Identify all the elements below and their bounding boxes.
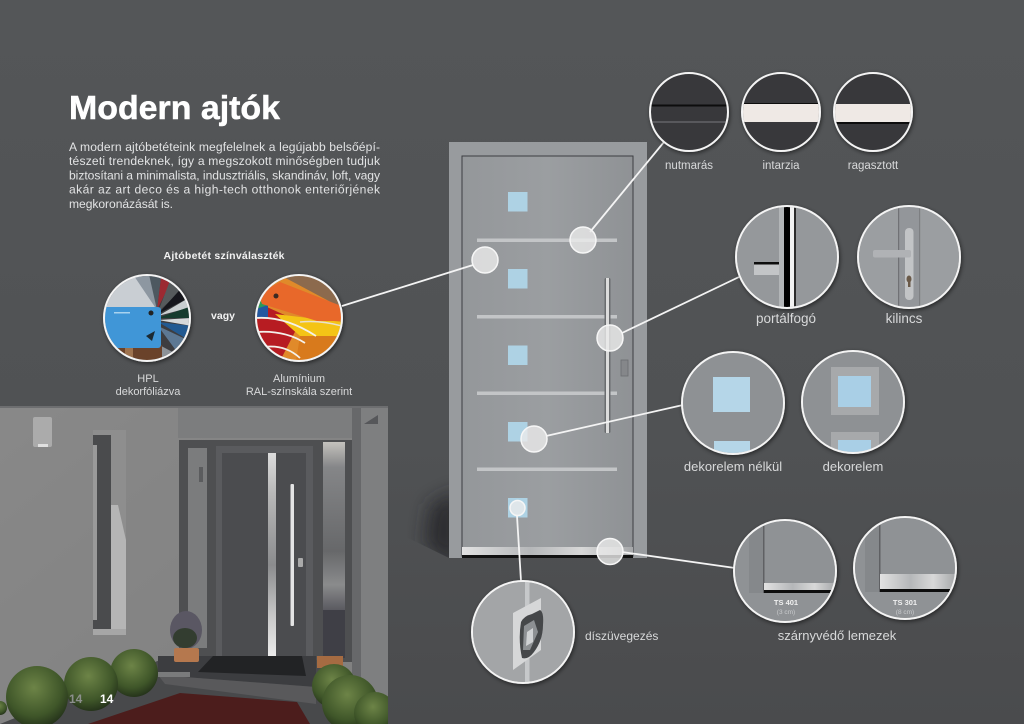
callout lines xyxy=(342,142,739,581)
hotspots xyxy=(472,227,623,564)
label: kilincs: kilincs xyxy=(886,311,923,326)
steel kick plate xyxy=(462,547,633,555)
detail: díszüvegezés xyxy=(472,581,574,683)
label: ragasztott: ragasztott xyxy=(848,160,899,172)
label: díszüvegezés: díszüvegezés xyxy=(585,629,658,643)
detail: TS 401: (3 cm) xyxy=(777,609,795,616)
label: dekorelem nélkül: dekorelem nélkül xyxy=(684,459,782,474)
detail: kilincs xyxy=(858,206,960,308)
lock xyxy=(621,360,628,376)
label: Alumínium: RAL-színskála szerint xyxy=(246,386,352,398)
detail: ragasztott xyxy=(834,73,912,151)
label: intarzia: intarzia xyxy=(762,160,800,172)
glass squares xyxy=(508,192,528,518)
photo: modern door entrance xyxy=(0,406,396,724)
door illustration xyxy=(449,142,647,558)
detail: intarzia xyxy=(742,73,820,151)
label: HPL: dekorfóliázva xyxy=(116,386,181,398)
detail: portálfogó xyxy=(736,206,838,308)
colour choice heading: Ajtóbetét színválaszték xyxy=(164,250,285,262)
detail: nutmarás xyxy=(650,73,728,151)
detail: dekorelem xyxy=(802,351,904,456)
label: portálfogó: portálfogó xyxy=(756,311,816,326)
intro text: biztosítani a minimalista, indusztriális, skandináv, loft, vagy xyxy=(69,168,381,182)
label: dekorelem: dekorelem xyxy=(823,459,883,474)
bar handle xyxy=(604,278,610,433)
door leaf xyxy=(462,156,633,556)
intro text: A modern ajtóbetéteink megfelelnek a legújabb belsőépí- xyxy=(69,140,380,154)
vagy label: vagy xyxy=(211,310,235,322)
detail: TS 301: (8 cm) xyxy=(896,609,914,616)
intro text: akár az art deco és a high-tech otthonok enteriőrjének xyxy=(69,182,381,196)
detail: TS 301: TS 301 xyxy=(893,598,917,607)
page number: 14 xyxy=(100,692,114,706)
detail: TS 401: TS 401 xyxy=(774,598,798,607)
colour swatch: RAL xyxy=(256,275,344,361)
label: szárnyvédő lemezek: szárnyvédő lemezek xyxy=(778,628,897,643)
intro text: megkoronázását is. xyxy=(69,197,173,211)
intro text: tészeti trendeknek, így a megszokott minőségben tudjuk xyxy=(69,154,381,168)
detail: TS 301 xyxy=(854,517,956,619)
inlay strips xyxy=(477,238,617,471)
label: nutmarás: nutmarás xyxy=(665,160,713,172)
detail: TS 401 xyxy=(734,520,836,622)
door shadow on wall xyxy=(420,489,449,558)
label: Alumínium: Alumínium xyxy=(273,373,325,385)
page number ghost: 14 xyxy=(69,692,83,706)
label: HPL: HPL xyxy=(137,373,159,385)
intro text xyxy=(69,140,381,211)
door frame xyxy=(449,142,647,558)
title: Modern ajtók xyxy=(69,89,281,126)
detail: dekorelem nélkül xyxy=(682,352,784,461)
colour swatch: HPL xyxy=(100,270,192,365)
